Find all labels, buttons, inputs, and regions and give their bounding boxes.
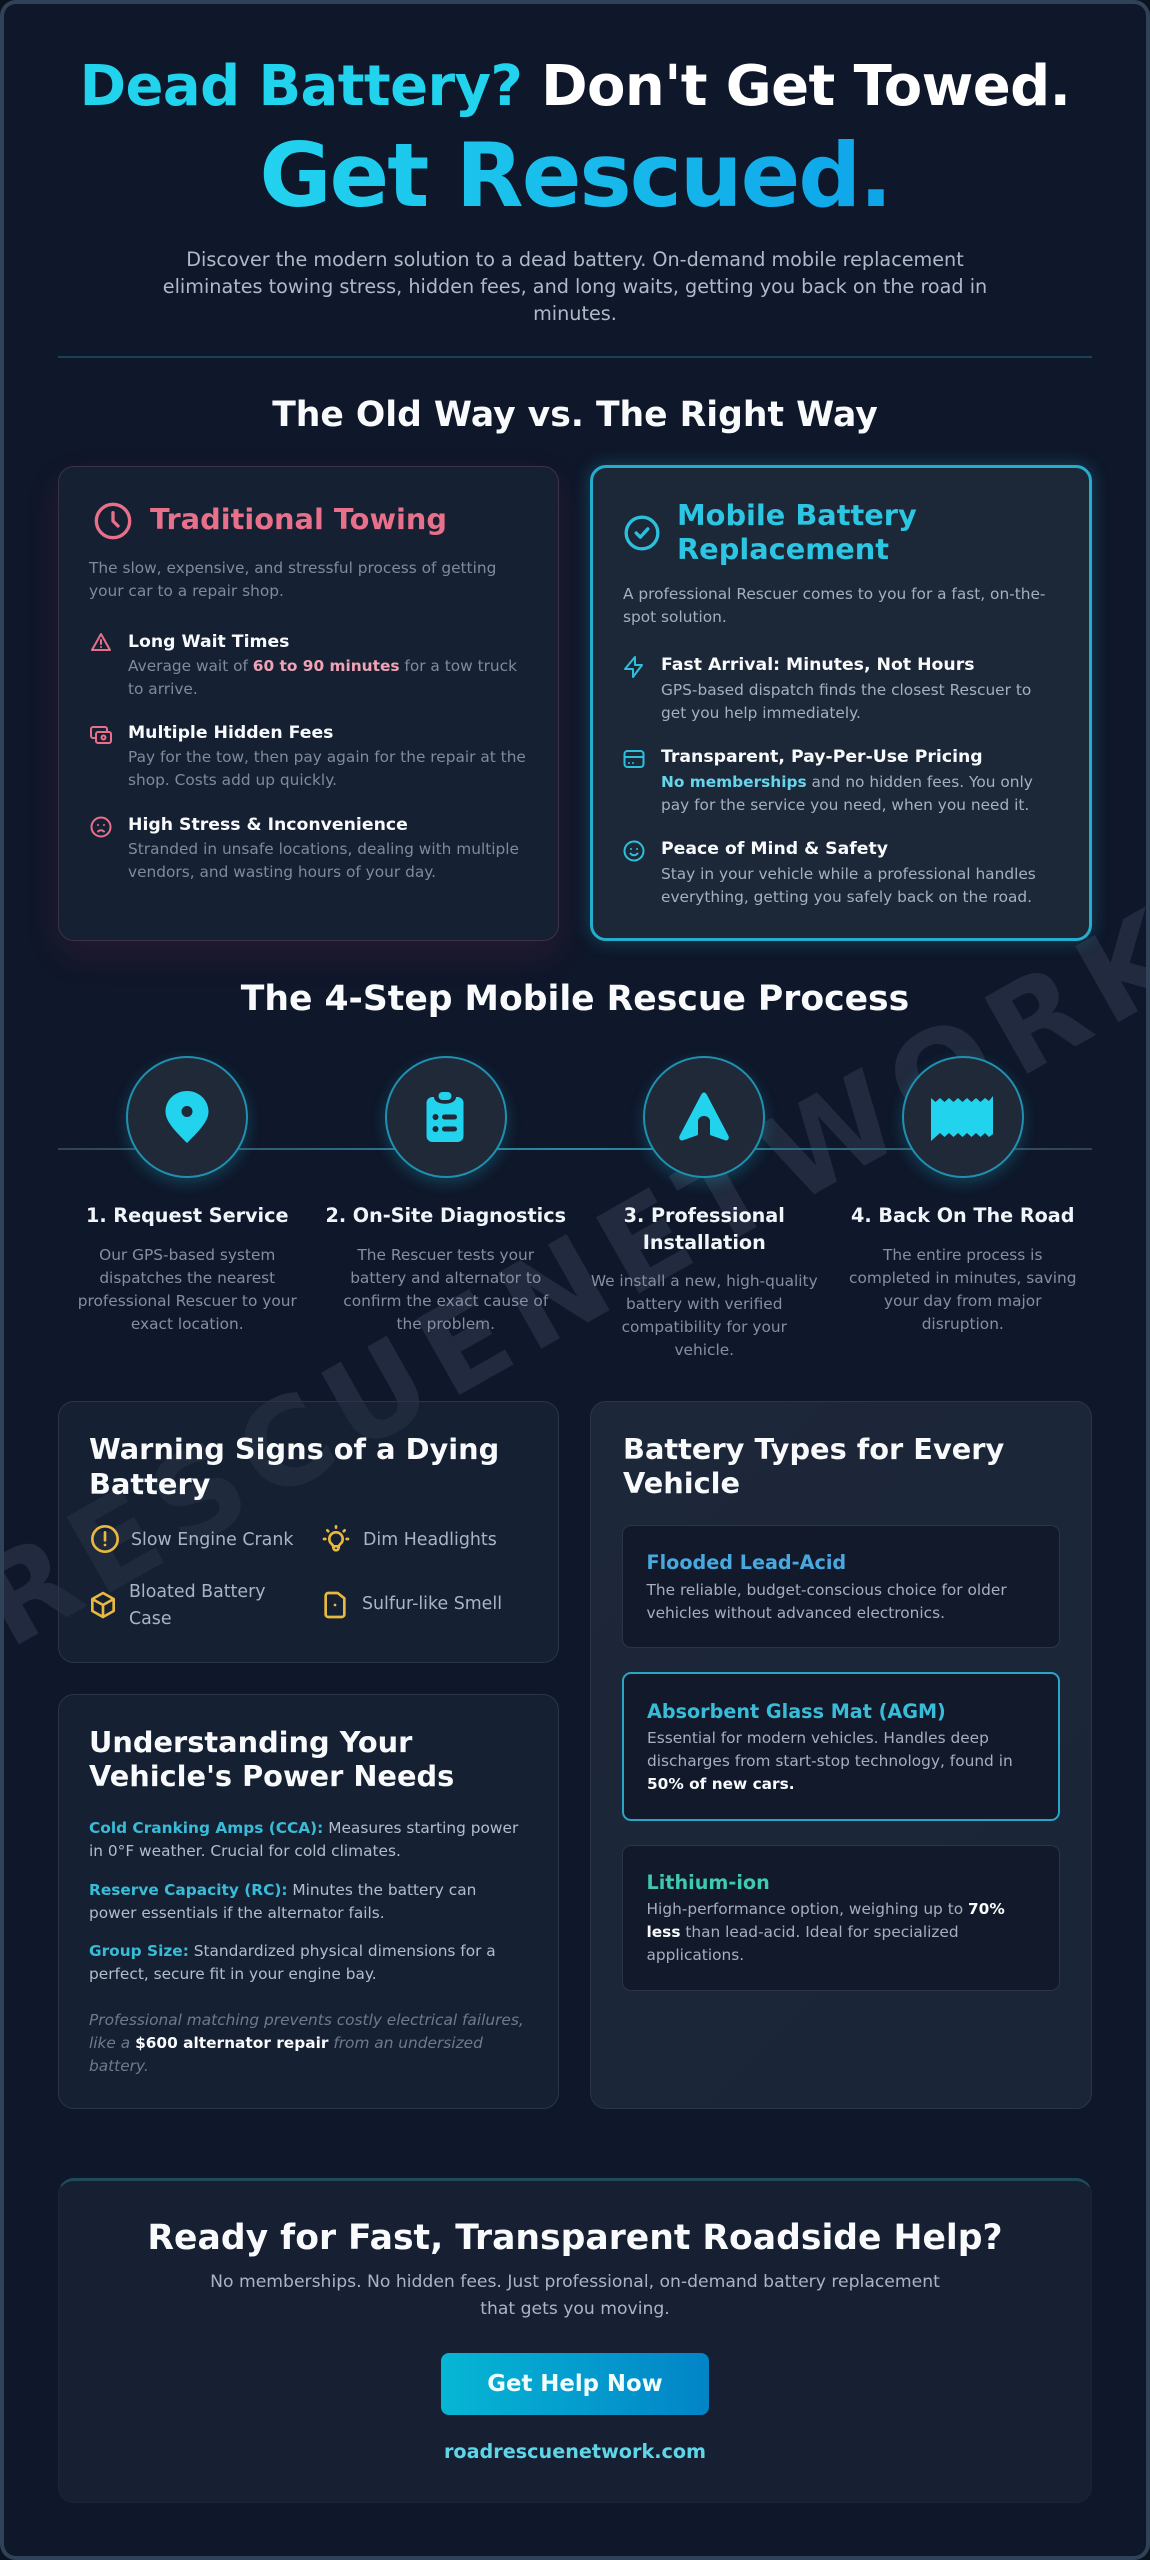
CCA definition: in 0°F weather. Crucial for cold climates.: [89, 1842, 401, 1860]
step 3 text: battery with verified: [626, 1294, 782, 1312]
lithium text: High-performance option, weighing up to 70%: [646, 1900, 1005, 1918]
power heading: Understanding Your: [89, 1725, 412, 1759]
CTA heading: Ready for Fast, Transparent Roadside Help?: [147, 2218, 1003, 2258]
hidden fees text: shop. Costs add up quickly.: [128, 771, 337, 789]
sign: bloated case: [129, 1582, 266, 1628]
professional matching note: like a $600 alternator repair from an undersized: [89, 2034, 483, 2052]
professional matching note: battery.: [89, 2057, 149, 2075]
icon: sad face: [90, 816, 112, 838]
stress text: vendors, and wasting hours of your day.: [128, 863, 436, 881]
mobile title: [677, 498, 917, 566]
long wait text: [128, 656, 517, 698]
icon: box: [90, 1592, 116, 1618]
heading: old way vs right way: The Old Way vs. The Right Way: [272, 395, 878, 435]
AGM title: Absorbent Glass Mat (AGM): [647, 1700, 946, 1722]
towing description: your car to a repair shop.: [89, 582, 284, 600]
step 3 text: compatibility for your: [622, 1318, 787, 1336]
long wait title: Long Wait Times: [128, 632, 289, 652]
CTA text: No memberships. No hidden fees. Just professional, on-demand battery replacement: [210, 2272, 940, 2292]
power heading: [89, 1725, 454, 1793]
towing description: [88, 559, 496, 600]
battery heading: Vehicle: [623, 1466, 740, 1500]
battery heading: Battery Types for Every: [623, 1432, 1004, 1466]
icon: smile: [624, 840, 644, 862]
CTA text: that gets you moving.: [480, 2298, 670, 2318]
title line 1: Dead Battery? Don't Get Towed.: [80, 54, 1070, 119]
icon: alert circle: [91, 1525, 119, 1553]
step 1 text: dispatches the nearest: [99, 1268, 275, 1286]
power heading: Vehicle's Power Needs: [89, 1759, 454, 1793]
mobile description: [623, 584, 1045, 626]
group size definition: Group Size: Standardized physical dimensions for a: [89, 1942, 496, 1960]
icon: navigation arrow: [643, 1056, 765, 1178]
mobile title: Mobile Battery: [677, 498, 917, 532]
icon: ticket: [902, 1056, 1024, 1178]
step 4 text: completed in minutes, saving: [849, 1268, 1076, 1286]
mobile description: A professional Rescuer comes to you for a fast, on-the-: [623, 584, 1045, 602]
RC definition: power essentials if the alternator fails.: [89, 1904, 385, 1922]
header intro text: minutes.: [533, 302, 617, 325]
step 3: professional installation: [591, 1056, 818, 1358]
stress text: [128, 840, 519, 881]
icon: warning triangle: [91, 633, 111, 651]
step 1 text: Our GPS-based system: [99, 1246, 275, 1264]
sign: bloated case: Case: [129, 1608, 172, 1628]
AGM text: [647, 1726, 1013, 1796]
step 1 title: 1. Request Service: [86, 1204, 289, 1226]
step 2 text: confirm the exact cause of: [343, 1292, 548, 1310]
sign: slow crank: Slow Engine Crank: [131, 1530, 293, 1550]
lithium title: Lithium-ion: [646, 1871, 770, 1894]
CCA definition: Cold Cranking Amps (CCA): Measures starting power: [89, 1819, 518, 1837]
peace of mind text: Stay in your vehicle while a professional handles: [661, 864, 1036, 882]
group size definition: [89, 1940, 496, 1986]
icon: clipboard: [385, 1056, 507, 1178]
card: AGM: [622, 1672, 1060, 1821]
button: Get Help Now: [487, 2371, 663, 2397]
fast arrival text: GPS-based dispatch finds the closest Rescuer to: [661, 680, 1031, 698]
step 3 text: [591, 1272, 818, 1358]
panel: traditional towing: [58, 466, 559, 941]
flooded text: vehicles without advanced electronics.: [646, 1604, 945, 1622]
warning heading: [89, 1432, 499, 1500]
hidden fees title: Multiple Hidden Fees: [128, 723, 333, 743]
header intro text: Discover the modern solution to a dead battery. On-demand mobile replacement: [186, 248, 964, 271]
mobile title: Replacement: [677, 532, 889, 566]
step 4 text: [849, 1246, 1076, 1332]
panel: call to action: [58, 2178, 1092, 2503]
panel: warning signs: [58, 1401, 559, 1663]
mobile description: spot solution.: [623, 608, 727, 626]
step 2 title: 2. On-Site Diagnostics: [325, 1204, 566, 1226]
towing title: Traditional Towing: [150, 502, 447, 536]
lithium text: applications.: [646, 1946, 744, 1964]
CCA definition: [89, 1819, 518, 1860]
hidden fees text: Pay for the tow, then pay again for the repair at the: [128, 748, 526, 766]
step 1: request service: [78, 1056, 297, 1332]
pricing text: [661, 772, 1033, 814]
professional matching note: [89, 2009, 524, 2078]
step 2 text: The Rescuer tests your: [357, 1246, 534, 1264]
title: [80, 54, 1070, 227]
icon: bulb: [322, 1525, 350, 1552]
icon: clock: [94, 502, 132, 540]
step 4: back on the road: [849, 1056, 1076, 1332]
sign: sulfur smell: Sulfur-like Smell: [362, 1594, 502, 1614]
fast arrival text: [661, 680, 1031, 722]
CTA text: [59, 2268, 1091, 2322]
title line 2: Get Rescued.: [259, 124, 891, 227]
sign: bloated case: Bloated Battery: [129, 1582, 266, 1602]
long wait text: Average wait of 60 to 90 minutes for a tow truck: [128, 656, 517, 674]
peace of mind text: everything, getting you safely back on the road.: [661, 888, 1032, 906]
warning heading: Warning Signs of a Dying: [89, 1432, 499, 1466]
panel: battery types: [590, 1401, 1092, 2109]
header intro text: eliminates towing stress, hidden fees, and long waits, getting you back on the road in: [163, 275, 987, 298]
card: lithium-ion: [622, 1845, 1060, 1991]
step 3 text: We install a new, high-quality: [591, 1272, 818, 1290]
panel: mobile battery replacement: [590, 465, 1092, 941]
step 1 text: [78, 1246, 297, 1332]
step 2 text: [343, 1246, 549, 1332]
flooded text: The reliable, budget-conscious choice for older: [646, 1580, 1007, 1598]
AGM text: Essential for modern vehicles. Handles deep: [647, 1728, 989, 1746]
towing description: The slow, expensive, and stressful process of getting: [89, 559, 496, 577]
pricing title: Transparent, Pay-Per-Use Pricing: [661, 746, 983, 766]
warning heading: Battery: [89, 1466, 210, 1500]
icon: cash: [90, 726, 112, 744]
step 1 text: professional Rescuer to your: [78, 1292, 297, 1310]
header intro text: [163, 248, 987, 325]
icon: map pin: [126, 1056, 248, 1178]
stress text: Stranded in unsafe locations, dealing with multiple: [128, 840, 519, 858]
fast arrival title: Fast Arrival: Minutes, Not Hours: [661, 654, 974, 674]
step 1 text: exact location.: [131, 1314, 244, 1332]
card: flooded lead-acid: [622, 1525, 1060, 1648]
heading: 4-step process: The 4-Step Mobile Rescue Process: [241, 979, 909, 1019]
long wait text: to arrive.: [128, 680, 198, 698]
battery heading: [623, 1432, 1004, 1501]
AGM text: discharges from start-stop technology, found in: [647, 1752, 1013, 1770]
lithium text: [646, 1898, 1005, 1967]
peace of mind title: Peace of Mind & Safety: [661, 838, 888, 858]
panel: power needs: [58, 1694, 559, 2109]
fast arrival text: get you help immediately.: [661, 704, 861, 722]
flooded title: Flooded Lead-Acid: [646, 1550, 846, 1574]
RC definition: [89, 1881, 476, 1922]
step 3 text: vehicle.: [674, 1340, 734, 1358]
step 4 title: 4. Back On The Road: [851, 1204, 1074, 1226]
step 4 text: disruption.: [922, 1314, 1004, 1332]
step 2: on-site diagnostics: [325, 1056, 566, 1332]
AGM text: 50% of new cars.: [647, 1774, 795, 1792]
flooded text: [646, 1578, 1007, 1624]
icon: sd file: [324, 1592, 346, 1618]
website link: roadrescuenetwork.com: [444, 2440, 706, 2463]
RC definition: Reserve Capacity (RC): Minutes the battery can: [89, 1881, 476, 1899]
step 3 title: [624, 1204, 785, 1254]
step 3 title: 3. Professional: [624, 1204, 785, 1226]
icon: check circle: [624, 516, 660, 550]
icon: bolt: [624, 656, 643, 678]
button: [441, 2353, 709, 2415]
lithium text: less than lead-acid. Ideal for specialized: [646, 1923, 959, 1941]
hidden fees text: [128, 748, 526, 789]
step 2 text: battery and alternator to: [350, 1268, 541, 1286]
step 4 text: The entire process is: [883, 1246, 1042, 1264]
pricing text: No memberships and no hidden fees. You only: [661, 772, 1033, 790]
step 3 title: Installation: [643, 1230, 766, 1254]
sign: dim headlights: Dim Headlights: [363, 1530, 497, 1550]
step 4 text: your day from major: [884, 1292, 1042, 1310]
peace of mind text: [661, 864, 1036, 906]
icon: credit card: [624, 750, 644, 768]
stress title: High Stress & Inconvenience: [128, 814, 408, 834]
pricing text: pay for the service you need, when you need it.: [661, 796, 1029, 814]
group size definition: perfect, secure fit in your engine bay.: [89, 1965, 377, 1983]
step 2 text: the problem.: [396, 1314, 495, 1332]
professional matching note: Professional matching prevents costly electrical failures,: [89, 2011, 524, 2029]
